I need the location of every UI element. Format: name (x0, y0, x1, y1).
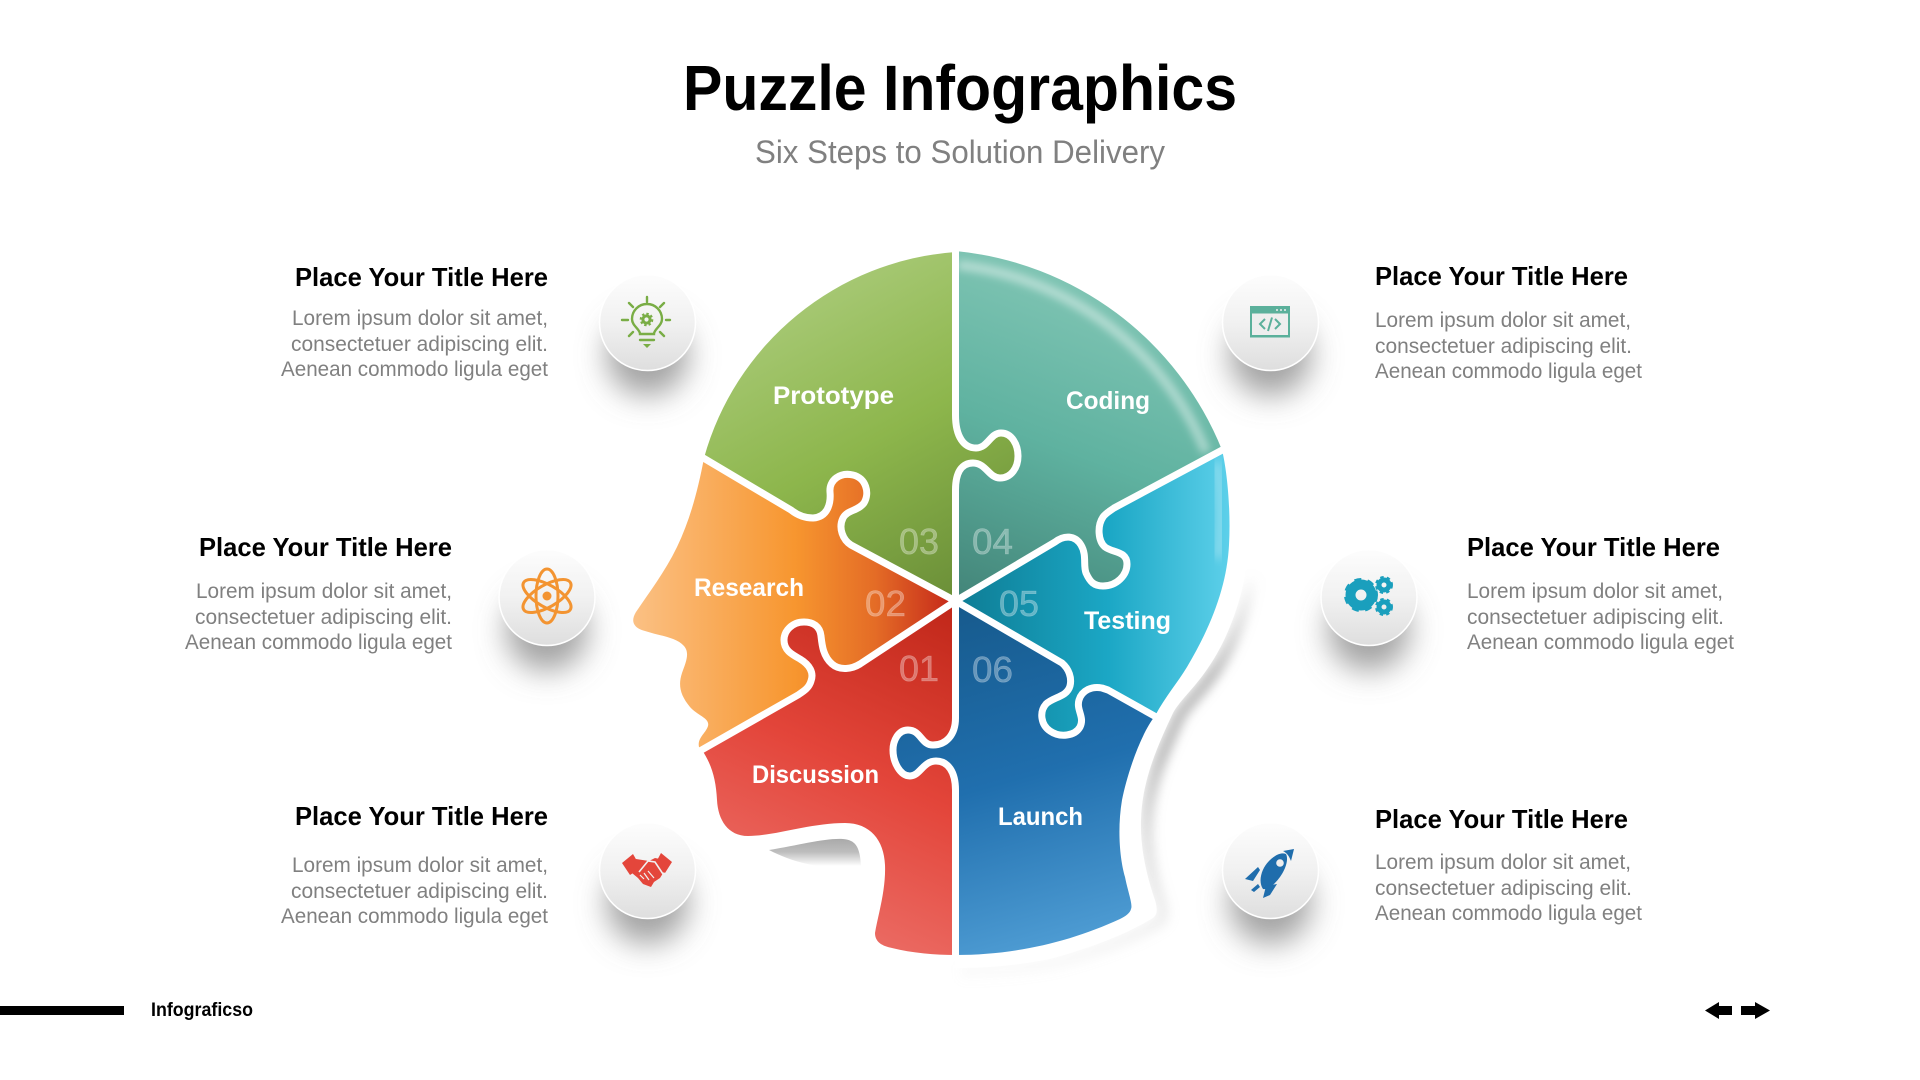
piece: research (633, 455, 956, 750)
number 01: 01 (899, 648, 939, 689)
icon badge: rocket (1222, 822, 1318, 944)
text block: bottom left: consectetuer adipiscing elit. (291, 879, 548, 903)
icon badge: handshake (600, 822, 696, 944)
text block: middle left: Place Your Title Here (199, 532, 452, 562)
icon badge: gears (1321, 550, 1417, 671)
subtitle: Six Steps to Solution Delivery (755, 134, 1165, 170)
text block: bottom left: Aenean commodo ligula eget (281, 904, 548, 928)
text block: bottom right: Lorem ipsum dolor sit amet, (1375, 850, 1631, 874)
title: Puzzle Infographics (683, 52, 1237, 124)
text block: top right: Place Your Title Here (1375, 261, 1628, 291)
number 02: 02 (865, 583, 906, 624)
chin shadow (769, 839, 861, 867)
icon: previous arrow (1705, 1002, 1732, 1019)
text block: top left: Aenean commodo ligula eget (281, 357, 548, 381)
text block: bottom right (1375, 804, 1642, 925)
number 03: 03 (899, 521, 939, 562)
text block: top right: Aenean commodo ligula eget (1375, 359, 1642, 383)
text block: top left: Lorem ipsum dolor sit amet, (292, 306, 548, 330)
icon: next arrow (1741, 1002, 1770, 1019)
text block: middle right (1467, 532, 1734, 654)
label: launch: Launch (998, 803, 1083, 831)
text block: middle right: Place Your Title Here (1467, 532, 1720, 562)
icon badge: atom (499, 550, 595, 671)
text block: middle left: consectetuer adipiscing elit. (195, 605, 452, 629)
label: testing: Testing (1084, 607, 1171, 635)
piece: testing (956, 450, 1230, 745)
label: coding: Coding (1066, 387, 1150, 415)
piece: discussion (702, 601, 956, 955)
text block: top left: consectetuer adipiscing elit. (291, 332, 548, 356)
head drop shadow (955, 455, 1254, 972)
text block: middle left: Lorem ipsum dolor sit amet, (196, 579, 452, 603)
text block: top right: Lorem ipsum dolor sit amet, (1375, 308, 1631, 332)
text block: bottom right: consectetuer adipiscing elit. (1375, 876, 1632, 900)
footer brand: Infograficso (151, 999, 253, 1021)
text block: bottom right: Place Your Title Here (1375, 804, 1628, 834)
piece: prototype (704, 252, 1018, 601)
text block: bottom left: Place Your Title Here (295, 801, 548, 831)
white puzzle seams (698, 246, 1226, 960)
highlight: coding rim (958, 265, 1206, 452)
text block: top right: consectetuer adipiscing elit. (1375, 334, 1632, 358)
label: prototype: Prototype (773, 382, 894, 410)
text block: top left (281, 262, 548, 381)
icon badge: code window (1222, 274, 1318, 396)
text block: middle left: Aenean commodo ligula eget (185, 630, 452, 654)
text block: bottom left (281, 801, 548, 928)
number 04: 04 (972, 521, 1013, 562)
panel: puzzle head (633, 246, 1230, 960)
number 06: 06 (972, 649, 1013, 690)
text block: middle left (185, 532, 452, 654)
text block: bottom right: Aenean commodo ligula eget (1375, 901, 1642, 925)
text block: bottom left: Lorem ipsum dolor sit amet, (292, 853, 548, 877)
highlight: testing rim (1216, 462, 1220, 558)
text block: middle right: consectetuer adipiscing elit. (1467, 605, 1724, 629)
label: discussion: Discussion (752, 761, 879, 789)
piece: coding (956, 251, 1222, 601)
icon badge: lightbulb (600, 274, 696, 396)
text block: top left: Place Your Title Here (295, 262, 548, 292)
number 05: 05 (999, 583, 1039, 624)
text block: top right (1375, 261, 1642, 383)
label: research: Research (694, 574, 804, 602)
text block: middle right: Aenean commodo ligula eget (1467, 630, 1734, 654)
text block: middle right: Lorem ipsum dolor sit amet, (1467, 579, 1723, 603)
footer bar (0, 1006, 124, 1015)
piece: launch (893, 601, 1155, 955)
